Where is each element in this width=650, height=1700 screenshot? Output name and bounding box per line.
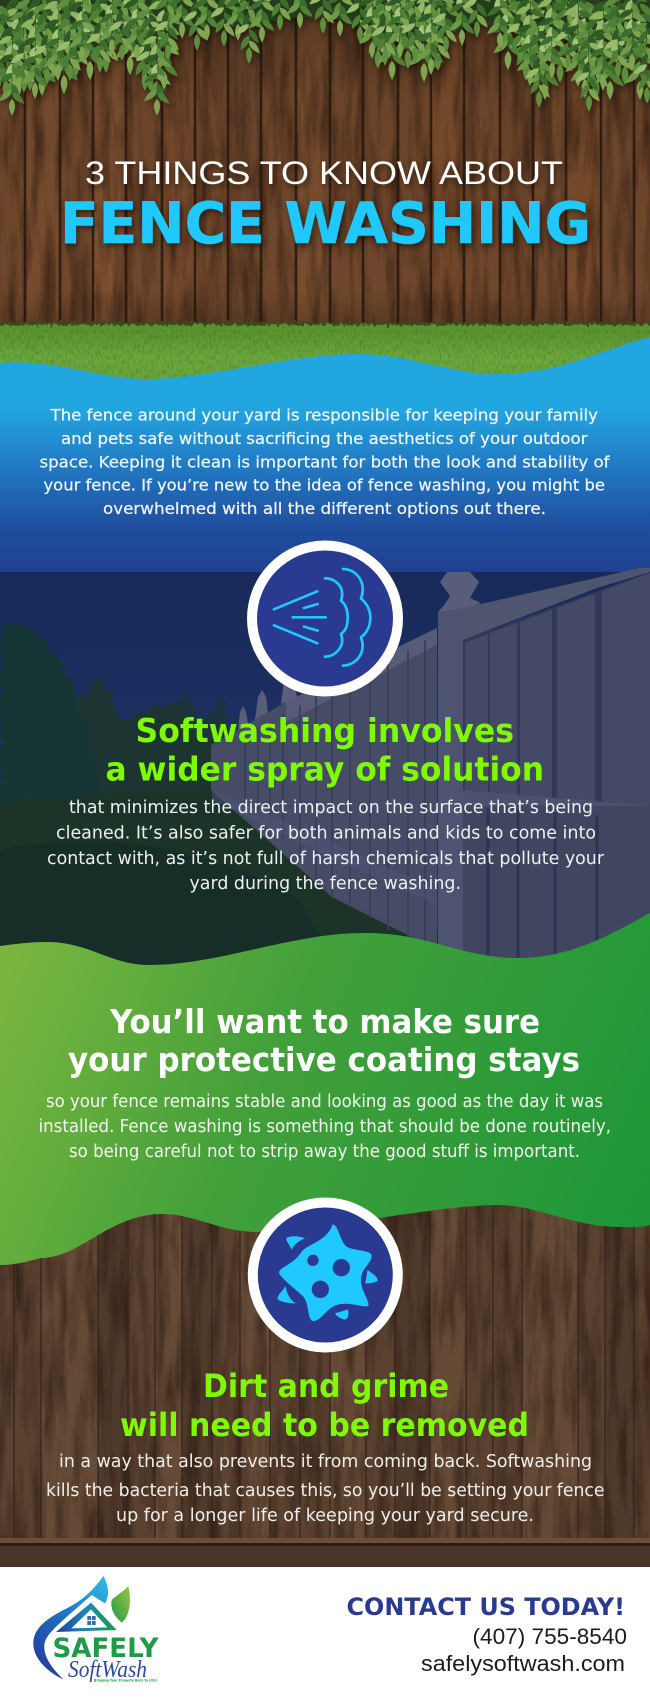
text block: softwashing body (47, 798, 605, 894)
text block: contact details: CONTACT US TODAY! (346, 1593, 625, 1621)
panel: white vinyl fence photo (0, 568, 650, 975)
text block: intro paragraph: space. Keeping it clean is important for both the look and stability of (40, 452, 610, 471)
heading: softwashing: a wider spray of solution (106, 750, 544, 788)
text block: protective coating body: installed. Fence washing is something that should be done routinely, (38, 1117, 611, 1137)
heading: softwashing: Softwashing involves (136, 712, 514, 750)
text block: protective coating body: so being careful not to strip away the good stuff is important. (69, 1142, 580, 1162)
heading: softwashing (106, 712, 544, 788)
title (60, 155, 591, 257)
text block: softwashing body: contact with, as it’s not full of harsh chemicals that pollute your (47, 849, 605, 869)
text block: intro paragraph: and pets safe without sacrificing the aesthetics of your outdoor (61, 429, 588, 448)
panel: lower wooden fence background (0, 1200, 650, 1567)
heading: protective coating: You’ll want to make sure (109, 1003, 540, 1041)
text block: protective coating body (38, 1092, 611, 1162)
text block: softwashing body: yard during the fence washing. (190, 874, 461, 894)
heading: protective coating (68, 1003, 580, 1079)
heading: dirt and grime: Dirt and grime (203, 1367, 449, 1405)
panel: intro blue wave (0, 337, 650, 573)
text block: protective coating body: so your fence remains stable and looking as good as the day it was (46, 1092, 603, 1112)
text block: dirt and grime body: up for a longer life of keeping your yard secure. (116, 1506, 534, 1526)
heading: dirt and grime: will need to be removed (120, 1406, 529, 1444)
text block: dirt and grime body: kills the bacteria that causes this, so you’ll be setting your fence (46, 1481, 604, 1501)
icon: spray badge (247, 540, 403, 696)
text block: intro paragraph: The fence around your yard is responsible for keeping your family (49, 406, 598, 424)
text block: intro paragraph: your fence. If you’re new to the idea of fence washing, you might be (44, 476, 605, 495)
heading: protective coating: your protective coating stays (68, 1041, 580, 1079)
text block: softwashing body: cleaned. It’s also safer for both animals and kids to come into (56, 824, 596, 844)
icon: hanging foliage (0, 0, 650, 117)
icon: Safely SoftWash logo (33, 1576, 159, 1683)
icon: Safely SoftWash logo: Bringing Your Property Back to Life! (94, 1678, 157, 1682)
icon: bacteria badge (248, 1198, 403, 1352)
icon: Safely SoftWash logo: SAFELY (52, 1633, 159, 1664)
icon: Safely SoftWash logo: SoftWash (68, 1657, 147, 1683)
text block: intro paragraph (40, 406, 610, 518)
heading: dirt and grime (120, 1367, 529, 1444)
text block: contact details: safelysoftwash.com (421, 1651, 625, 1676)
text block: dirt and grime body: in a way that also prevents it from coming back. Softwashing (59, 1452, 592, 1472)
title: 3 THINGS TO KNOW ABOUT (85, 155, 563, 191)
text block: intro paragraph: overwhelmed with all the different options out there. (103, 499, 546, 518)
title: FENCE WASHING (60, 191, 591, 257)
panel: green wave (0, 913, 650, 1265)
text block: contact details (346, 1593, 627, 1676)
text block: softwashing body: that minimizes the direct impact on the surface that’s being (69, 798, 593, 818)
panel: grass strip (0, 322, 650, 435)
panel: footer (0, 1567, 650, 1700)
text block: contact details: (407) 755-8540 (472, 1624, 627, 1649)
text block: dirt and grime body (46, 1452, 604, 1526)
panel: wooden fence hero background (0, 0, 650, 340)
